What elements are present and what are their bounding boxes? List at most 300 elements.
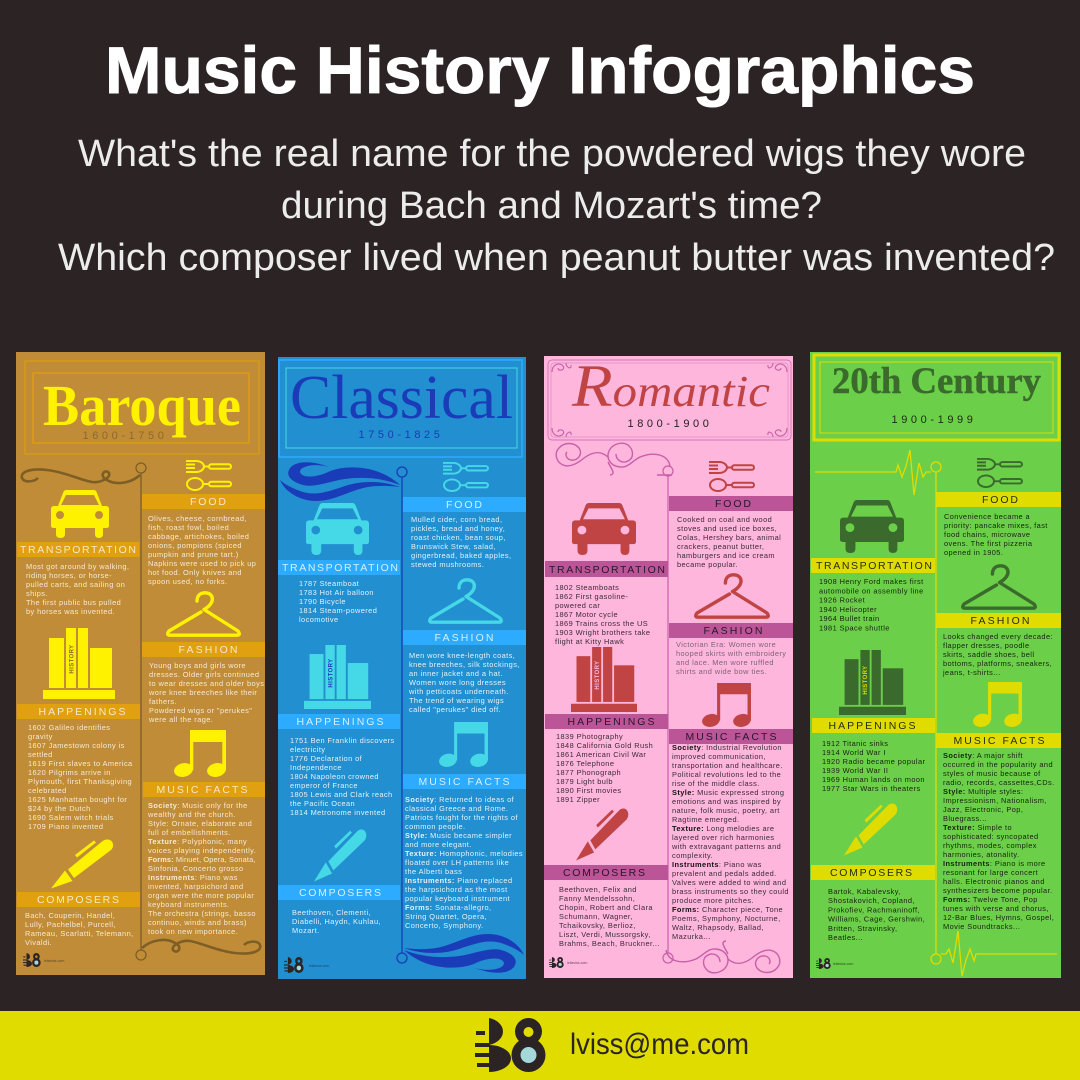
text: music facts: synthesizers become popular. (943, 886, 1053, 895)
text: food: onions, pompions (spiced (148, 541, 242, 550)
text: music facts: Forms: (672, 905, 700, 914)
logo: 20th Century: leilaviss.com (833, 962, 853, 966)
text: music facts: Valves were added to wind and (672, 878, 786, 887)
text: happenings: 1891 Zipper (556, 795, 600, 804)
text: food: priority: pancake mixes, fast (944, 521, 1048, 530)
header: fashion (669, 623, 793, 638)
panel: Baroque (16, 352, 265, 975)
text: fashion: an inner jacket and a hat. (409, 669, 503, 678)
text: music facts: Movie Soundtracks... (943, 922, 1020, 931)
text: music facts: occurred in the popularity and (943, 760, 1053, 769)
text: music facts: took on new importance. (148, 927, 238, 936)
header: transportation: TRANSPORTATION (282, 562, 398, 574)
Classical title frame (279, 360, 522, 457)
header: food (142, 494, 265, 509)
text: music facts: Instruments (943, 859, 990, 868)
text: music facts: rhythms, modes, complex (943, 841, 1037, 850)
header: food (936, 492, 1061, 507)
text: music facts: Texture: (672, 824, 704, 833)
header: fashion: FASHION (970, 615, 1030, 627)
text: music facts: Jazz, Electronic, Pop, (943, 805, 1023, 814)
Classical dates: 1750-1825 (358, 429, 444, 441)
icon: hanger (168, 593, 239, 635)
text: music facts: Sonata-allegro, (433, 903, 491, 912)
text: music facts: halls. Electronic pianos and (943, 877, 1045, 886)
text: music facts: Homophonic, melodies (437, 849, 523, 858)
text: music facts: voices playing independently. (148, 846, 256, 855)
text: happenings: 1625 Manhattan bought for (28, 795, 127, 804)
text: music facts: and more elegant. (405, 840, 472, 849)
text: music facts: Piano replaced (455, 876, 512, 885)
text: music facts: : Polyphonic, many (177, 837, 247, 846)
text: music facts: 12-Bar Blues, Hymns, Gospel, (943, 913, 1054, 922)
text: happenings: 1709 Piano invented (28, 822, 103, 831)
logo: Baroque: leilaviss.com (44, 959, 64, 963)
text: music facts: complexity. (672, 851, 713, 860)
header: happenings: HAPPENINGS (296, 716, 384, 728)
text: composers: Rameau, Scarlatti, Telemann, (25, 929, 134, 938)
logo: Romantic: leilaviss.com (567, 961, 587, 965)
header: fashion (142, 642, 265, 657)
text: composers: Brahms, Beach, Bruckner... (559, 939, 660, 948)
text: happenings: 1876 Telephone (556, 759, 614, 768)
text: music facts: Texture (148, 837, 177, 846)
text: transportation: ships. (26, 589, 48, 598)
text: food: spoon used, no forks. (148, 577, 228, 586)
header: food: FOOD (982, 494, 1018, 506)
text: food: Convenience became a (944, 512, 1031, 521)
text: happenings: 1977 Star Wars in theaters (822, 784, 921, 793)
text: happenings: 1939 World War II (822, 766, 888, 775)
text: music facts: radio, records, cassettes,CDs. (943, 778, 1055, 787)
text: food: stoves and used ice boxes, (677, 524, 777, 533)
text: transportation: powered car (555, 601, 600, 610)
Romantic spine and flourishes (556, 443, 780, 973)
text: music facts: Style: (943, 787, 966, 796)
text: food: fish, roast fowl, boiled (148, 523, 229, 532)
text: happenings: 1890 First movies (556, 786, 621, 795)
text: fashion: wore knee breeches like their (148, 688, 257, 697)
text: fashion: called "perukes" died off. (409, 705, 501, 714)
text: happenings: 1690 Salem witch trials (28, 813, 114, 822)
header: food: FOOD (446, 499, 482, 511)
text: transportation: 1869 Trains cross the US (555, 619, 648, 628)
icon: car (572, 503, 636, 555)
header: food (403, 497, 526, 512)
text: happenings: 1804 Napoleon crowned (290, 772, 379, 781)
text: music facts: : Returned to ideas of (434, 795, 515, 804)
panel: Romantic (544, 353, 793, 978)
text: music facts: Sinfonia, Concerto grosso (148, 864, 244, 873)
text: composers: Beethoven, Clementi, (292, 908, 371, 917)
text: transportation: 1964 Bullet train (819, 614, 880, 623)
text: music facts: Mazurka... (672, 932, 711, 941)
Romantic dates: 1800-1900 (627, 418, 713, 430)
text: food: Olives, cheese, cornbread, (148, 514, 247, 523)
text: music facts: Political revolutions led to the (672, 770, 781, 779)
text: music facts: Style: (672, 788, 695, 797)
text: music facts: The orchestra (strings, basso (148, 909, 256, 918)
header: fashion: FASHION (704, 625, 762, 637)
footer email: lviss@me.com (570, 1028, 749, 1061)
header: music facts (403, 774, 526, 789)
text: food: opened in 1905. (944, 548, 1003, 557)
text: happenings: 1848 California Gold Rush (556, 741, 653, 750)
Romantic title frame (548, 360, 791, 440)
icon: hanger (430, 580, 501, 622)
header: happenings: HAPPENINGS (828, 720, 916, 732)
20th Century spine and heartbeat lines (815, 450, 1057, 976)
icon: history books (839, 650, 906, 715)
Baroque spine and flourishes (22, 463, 260, 960)
Classical heading: Classical (290, 364, 513, 432)
icon: pen (314, 829, 366, 881)
text: transportation: 1926 Rocket (819, 596, 865, 605)
header: music facts: MUSIC FACTS (954, 735, 1044, 747)
text: transportation: 1787 Steamboat (299, 579, 359, 588)
text: transportation: 1802 Steamboats (555, 583, 619, 592)
text: music facts: Multiple styles: (966, 787, 1023, 796)
logo: Baroque (23, 953, 64, 967)
text: food: hamburgers and ice cream (677, 551, 775, 560)
header: happenings (545, 714, 668, 729)
text: transportation: 1867 Motor cycle (555, 610, 618, 619)
text: fashion: jeans, t-shirts... (942, 668, 1001, 677)
text: music facts: Society (943, 751, 973, 760)
text: composers: Diabelli, Haydn, Kuhlau, (292, 917, 381, 926)
text: food: Colas, Hershey bars, animal (677, 533, 781, 542)
header: food: FOOD (715, 498, 751, 510)
text: music facts: Instruments (672, 860, 719, 869)
header: food: FOOD (190, 496, 226, 508)
icon: history books: HISTORY (328, 658, 334, 688)
text: music facts: Bluegrass... (943, 814, 987, 823)
icon: history books: HISTORY (70, 644, 76, 674)
icon: car (840, 500, 904, 553)
text: music facts: : Industrial Revolution (701, 743, 782, 752)
text: food: ovens. The first pizzeria (944, 539, 1033, 548)
subtitle questions (58, 133, 1055, 279)
text: music facts: Forms: (405, 903, 433, 912)
text: music facts: Music became simpler (428, 831, 512, 840)
text: transportation: 1783 Hot Air balloon (299, 588, 374, 597)
text: happenings: 1839 Photography (556, 732, 623, 741)
text: happenings: 1920 Radio became popular (822, 757, 925, 766)
text: fashion: fathers. (149, 697, 177, 706)
text: happenings: Plymouth, first Thanksgiving (28, 777, 132, 786)
text: transportation: 1814 Steam-powered (299, 606, 377, 615)
text: music facts: Forms: (943, 895, 971, 904)
header: transportation: TRANSPORTATION (20, 544, 136, 556)
icon: cutlery (977, 459, 1022, 487)
text: food: food chains, microwave (944, 530, 1030, 539)
text: food: cabbage, artichokes, boiled (148, 532, 249, 541)
text: music facts: organ were the more popular (148, 891, 254, 900)
icon: cutlery (709, 462, 754, 491)
text: happenings: 1914 World War I (822, 748, 886, 757)
text: transportation: 1940 Helicopter (819, 605, 877, 614)
text: transportation: 1981 Space shuttle (819, 624, 890, 632)
text: transportation: 1903 Wright brothers take (555, 628, 650, 637)
icon: pen (844, 803, 897, 855)
20th Century heading: 20th Century (832, 361, 1041, 402)
icon: hanger (963, 566, 1035, 608)
text: music facts: Patriots fought for the rights of (405, 813, 518, 822)
text: happenings: Independence (290, 763, 342, 772)
text: happenings: 1751 Ben Franklin discovers (290, 736, 395, 745)
text: happenings: 1814 Metronome invented (290, 808, 386, 817)
text: music facts: styles of music because of (943, 769, 1041, 778)
text: fashion: shirts and wide bow ties. (676, 667, 767, 676)
header: happenings (812, 718, 935, 733)
20th Century dates: 1900-1999 (891, 414, 977, 426)
text: composers: Lully, Pachelbel, Purcell, (25, 920, 116, 929)
text: composers: Prokofiev, Rachmaninoff, (828, 905, 920, 914)
text: transportation: The first public bus pulled (26, 598, 121, 607)
footer band (0, 1011, 1080, 1080)
text: food: stewed mushrooms. (411, 560, 484, 569)
text: food: Napkins were used to pick up (148, 559, 256, 568)
icon: cutlery (186, 461, 231, 490)
text: music facts: common people. (405, 822, 466, 831)
text: happenings: electricity (290, 745, 325, 754)
text: happenings: 1620 Pilgrims arrive in (28, 768, 111, 777)
text: composers: Britten, Stravinsky, (828, 924, 897, 933)
text: music facts: sophisticated: syncopated (943, 832, 1039, 841)
text: music facts: produce more pitches. (672, 896, 754, 905)
text: fashion: Powdered wigs or "perukes" (149, 706, 252, 715)
text: transportation: 1908 Henry Ford makes first (819, 577, 924, 586)
text: music facts: Waltz, Rhapsody, Ballad, (672, 923, 764, 932)
text: music facts: harmonies, atonality. (943, 850, 1019, 859)
header: music facts: MUSIC FACTS (418, 776, 510, 788)
header: composers (278, 885, 400, 900)
text: food: pickles, bread and honey, (411, 524, 505, 533)
text: fashion: were all the rage. (148, 715, 213, 724)
header: food (669, 496, 793, 511)
text: happenings: 1969 Human lands on moon (822, 775, 925, 784)
text: happenings: the Pacific Ocean (290, 799, 355, 808)
subtitle questions: Which composer lived when peanut butter was invented? (58, 237, 1055, 279)
text: transportation: locomotive (299, 615, 339, 624)
header: transportation: TRANSPORTATION (816, 560, 932, 572)
header: composers: COMPOSERS (830, 867, 912, 879)
logo: Classical (284, 957, 329, 973)
text: happenings: 1879 Light bulb (556, 777, 613, 786)
text: fashion: knee breeches, silk stockings, (409, 660, 520, 669)
20th Century title frame (814, 355, 1059, 440)
text: fashion: dresses. Older girls continued (149, 670, 259, 679)
text: music facts: Minuet, Opera, Sonata, (174, 855, 256, 864)
icon: history books (571, 647, 637, 712)
text: happenings: 1602 Galileo identifies (28, 723, 110, 732)
text: happenings: gravity (28, 732, 53, 741)
text: music facts: Society (405, 795, 435, 804)
text: fashion: bottoms, platforms, sneakers, (943, 659, 1052, 668)
text: food: became popular. (677, 560, 738, 569)
Baroque title frame (25, 361, 259, 454)
text: music facts: Character piece, Tone (700, 905, 783, 914)
icon: music note (972, 682, 1023, 729)
icon: history books: HISTORY (595, 660, 601, 690)
text: music facts: : Music only for the (177, 801, 248, 810)
text: happenings: 1877 Phonograph (556, 768, 621, 777)
text: music facts: popular keyboard instrument (405, 894, 510, 903)
header: music facts (936, 733, 1061, 748)
text: transportation: automobile on assembly line (819, 586, 924, 595)
text: food: pumpkin and prune tart.) (148, 550, 239, 559)
icon: history books: HISTORY (863, 665, 869, 695)
header: fashion (403, 630, 526, 645)
text: music facts: continuo, winds and brass) (148, 918, 247, 927)
icon: music note (701, 683, 752, 729)
text: music facts: full of embellishments. (148, 828, 231, 837)
text: music facts: resonant for large concert (943, 868, 1038, 877)
icon: history books (304, 645, 371, 709)
header: composers: COMPOSERS (299, 887, 381, 899)
icon: music note (438, 722, 489, 769)
text: composers: Shostakovich, Copland, (828, 896, 915, 905)
text: composers: Beethoven, Felix and (559, 885, 637, 894)
text: composers: Bartok, Kabalevsky, (828, 887, 901, 896)
text: transportation: pulled carts, and sailing on (26, 580, 125, 589)
text: music facts: Texture: (405, 849, 437, 858)
text: music facts: Instruments (148, 873, 195, 882)
text: happenings: 1912 Titanic sinks (822, 739, 888, 748)
header: happenings (278, 714, 400, 729)
text: music facts: floated over LH patterns like (405, 858, 509, 867)
text: music facts: emotions and was inspired by (672, 797, 781, 806)
text: music facts: brass instruments so they could (672, 887, 789, 896)
header: composers (544, 865, 668, 880)
text: composers: Schumann, Wagner, (559, 912, 633, 921)
text: food: roast chicken, bean soup, (411, 533, 506, 542)
logo: Classical: leilaviss.com (309, 964, 329, 968)
logo: Romantic (549, 957, 587, 968)
text: composers: Chopin, Robert and Clara (559, 903, 653, 912)
text: music facts: Style: (405, 831, 428, 840)
header: composers: COMPOSERS (563, 867, 645, 879)
header: happenings: HAPPENINGS (38, 706, 126, 718)
text: music facts: Style: Ornate, elaborate and (148, 819, 252, 828)
text: music facts: rise of the middle class. (672, 779, 760, 788)
icon: pen (576, 808, 628, 860)
text: fashion: The trend of wearing wigs (409, 696, 504, 705)
text: fashion: hooped skirts with embroidery (676, 649, 786, 658)
text: music facts: classical Greece and Rome. (405, 804, 508, 813)
subtitle questions: What's the real name for the powdered wigs they wore (78, 133, 1026, 175)
header: music facts: MUSIC FACTS (156, 784, 248, 796)
text: happenings: settled (28, 750, 53, 759)
text: food: crackers, peanut butter, (677, 542, 764, 551)
text: music facts: : A major shift (972, 751, 1023, 760)
title: Music History Infographics (105, 33, 975, 107)
text: music facts: : Piano was (719, 860, 762, 869)
text: food: Cooked on coal and wood (677, 515, 772, 524)
text: music facts: with extravagant patterns and (671, 842, 781, 851)
text: fashion: skirts, saddle shoes, bell (943, 650, 1034, 659)
text: fashion: Victorian Era: Women wore (676, 640, 776, 649)
text: happenings: 1776 Declaration of (290, 754, 363, 763)
text: music facts: Twelve Tone, Pop (971, 895, 1038, 904)
header: fashion: FASHION (434, 632, 494, 644)
icon: pen (51, 839, 113, 888)
icon: music note (173, 730, 227, 779)
text: music facts: keyboard instruments. (148, 900, 230, 909)
text: music facts: Society (148, 801, 178, 810)
header: music facts (143, 782, 265, 797)
text: music facts: : Piano is more (990, 859, 1046, 868)
text: music facts: Society (672, 743, 702, 752)
text: composers: Mozart. (292, 926, 320, 935)
text: music facts: prevalent and pedals added. (672, 869, 777, 878)
text: fashion: with petticoats underneath. (408, 687, 509, 696)
text: transportation: riding horses, or horse- (26, 571, 112, 580)
text: transportation: by horses was invented. (26, 607, 115, 616)
text: music facts: nature, folk music, poetry, art (672, 806, 780, 815)
text: happenings: emperor of France (290, 781, 358, 790)
header: fashion: FASHION (178, 644, 238, 656)
text: fashion: flapper dresses, poodle (943, 641, 1030, 650)
text: music facts: Impressionism, Nationalism, (943, 796, 1047, 805)
text: transportation: 1862 First gasoline- (555, 592, 628, 601)
icon: cutlery (443, 463, 488, 491)
text: fashion: to wear dresses and older boys (149, 679, 264, 688)
text: music facts: wealthy and the church. (147, 810, 236, 819)
icon: hanger (696, 575, 768, 617)
header: composers (811, 865, 935, 880)
text: fashion: and lace. Men wore ruffled (676, 658, 774, 667)
text: composers: Bach, Couperin, Handel, (25, 911, 115, 920)
text: music facts: Poems, Symphony, Nocturne, (672, 914, 781, 923)
text: food: Brunswick Stew, salad, (411, 542, 496, 551)
header: fashion (936, 613, 1061, 628)
text: happenings: 1861 American Civil War (556, 750, 646, 759)
header: composers: COMPOSERS (37, 894, 119, 906)
Baroque heading: Baroque (43, 373, 241, 438)
text: music facts: Long melodies are (704, 824, 774, 833)
logo: 20th Century (816, 958, 853, 969)
text: transportation: 1790 Bicycle (299, 597, 346, 606)
icon: car (306, 503, 369, 555)
text: music facts: Forms: (148, 855, 174, 864)
text: music facts: the harpsichord as the most (405, 885, 508, 894)
text: music facts: String Quartet, Opera, (405, 912, 487, 921)
icon: history books (43, 628, 115, 699)
text: fashion: Young boys and girls wore (149, 661, 246, 670)
panel: Classical (278, 357, 526, 979)
header: music facts (669, 729, 793, 744)
text: transportation: Most got around by walking, (26, 562, 129, 571)
subtitle questions: during Bach and Mozart's time? (281, 185, 822, 227)
text: fashion: Looks changed every decade: (943, 632, 1053, 641)
text: transportation: flight at Kitty Hawk (555, 637, 624, 646)
text: composers: Fanny Mendelssohn, (559, 894, 635, 903)
text: fashion: Women wore long dresses (409, 678, 506, 687)
text: music facts: : Piano was (195, 873, 238, 882)
text: music facts: improved communication, (672, 752, 766, 761)
text: happenings: 1607 Jamestown colony is (28, 741, 125, 750)
header: composers (17, 892, 140, 907)
text: happenings: 1805 Lewis and Clark reach (290, 790, 393, 799)
text: composers: Tchaikovsky, Berlioz, (559, 921, 636, 930)
text: composers: Beatles... (828, 933, 863, 942)
text: happenings: celebrated (28, 786, 67, 795)
text: music facts: transportation and healthcare. (672, 761, 783, 770)
text: food: gingerbread, baked apples, (411, 551, 512, 560)
text: music facts: Texture: (943, 823, 975, 832)
text: music facts: invented, harpsichord and (148, 882, 244, 891)
